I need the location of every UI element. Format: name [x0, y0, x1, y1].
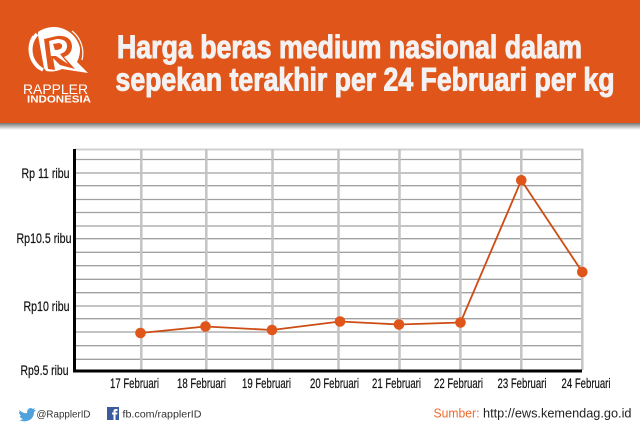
header banner [0, 0, 640, 130]
x-axis labels: 18 Februari [177, 375, 226, 391]
facebook handle: fb.com/rapplerID [122, 410, 202, 420]
footer: social handles [19, 407, 202, 421]
x-axis labels: 19 Februari [242, 375, 291, 391]
y-axis labels [16, 165, 72, 378]
logo wordmark: RAPPLER [23, 82, 88, 97]
x-axis labels: 22 Februari [434, 375, 483, 391]
icon: twitter [19, 408, 36, 421]
logo wordmark [23, 82, 91, 106]
data points [135, 175, 588, 338]
title [116, 29, 614, 98]
logo wordmark: INDONESIA [27, 94, 91, 106]
x-axis labels: 20 Februari [310, 375, 359, 391]
line chart [16, 149, 610, 391]
logo: Rappler Indonesia [23, 27, 91, 105]
x-axis labels: 21 Februari [372, 375, 421, 391]
x-axis labels [110, 375, 610, 391]
twitter handle: @RapplerID [36, 410, 90, 420]
x-axis labels: 17 Februari [110, 375, 159, 391]
source line: http://ews.kemendag.go.id [483, 406, 632, 420]
x-axis labels: 23 Februari [498, 375, 546, 391]
source line: Sumber: [434, 406, 480, 420]
gridlines [75, 150, 583, 359]
y-axis labels: Rp10 ribu [24, 298, 70, 314]
y-axis labels: Rp10.5 ribu [16, 230, 72, 246]
icon: facebook [107, 407, 119, 420]
y-axis labels: Rp9.5 ribu [20, 362, 68, 378]
axes [73, 149, 582, 372]
x-axis labels: 24 Februari [562, 375, 610, 391]
data line [140, 180, 582, 333]
y-axis labels: Rp 11 ribu [22, 165, 70, 181]
